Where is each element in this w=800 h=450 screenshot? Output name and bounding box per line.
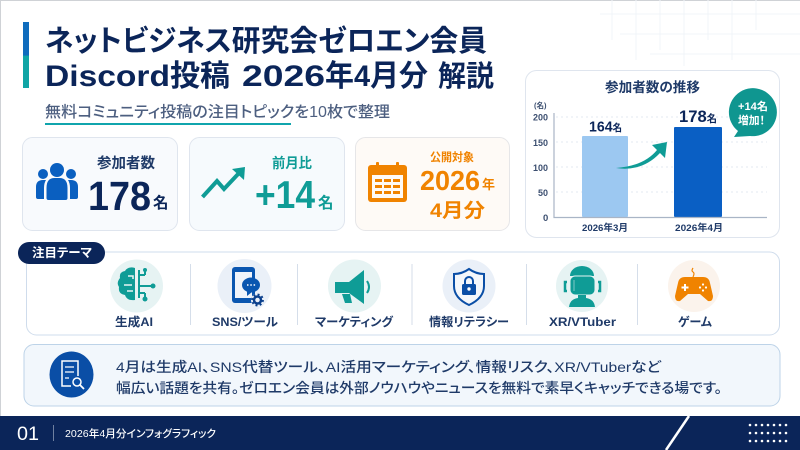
bar chart: 100: [533, 163, 548, 174]
title: 投稿: [170, 60, 230, 93]
icon: people: [36, 163, 78, 200]
panel: publication target: 年: [482, 177, 495, 192]
theme: information literacy: 情報リテラシー: [429, 314, 509, 329]
panel: summary: [24, 344, 780, 406]
callout: increase: +14名: [738, 99, 768, 113]
panel: month over month: +14: [255, 174, 315, 217]
bar chart: 2026年4月: [675, 222, 723, 234]
panel: featured themes: [18, 242, 780, 335]
theme: XR VTuber: XR/VTuber: [549, 315, 616, 329]
panel: participants: 参加者数: [97, 154, 155, 172]
panel: participant chart: [526, 70, 780, 238]
theme: information literacy: [429, 260, 509, 329]
bar chart: 0: [543, 213, 548, 224]
icon: rising arrow: [202, 167, 245, 197]
arrow: increase: [616, 142, 667, 169]
chart heading: 参加者数の推移: [605, 79, 701, 95]
bar chart: (名): [534, 100, 547, 110]
title: [45, 25, 494, 93]
theme: marketing: マーケティング: [315, 314, 394, 329]
theme: generative AI: 生成AI: [115, 314, 153, 329]
panel: publication target: 公開対象: [430, 150, 474, 164]
page number: 01: [17, 424, 39, 445]
summary text: 幅広い話題を共有。ゼロエン会員は外部ノウハウやニュースを無料で素早くキャッチできる場です。: [116, 380, 722, 396]
heading: featured themes: [18, 242, 105, 264]
theme: generative AI: [110, 260, 163, 329]
panel: month over month: 名: [318, 194, 334, 212]
icon: document search: [50, 352, 94, 398]
bar chart: 150: [533, 138, 548, 149]
bar chart: 50: [538, 188, 548, 199]
title: ネットビジネス研究会ゼロエン会員: [45, 25, 487, 58]
theme: SNS tools: SNS/ツール: [212, 315, 278, 329]
bar chart: 200: [533, 112, 548, 124]
title: 解説: [438, 60, 494, 93]
callout: increase: [729, 88, 777, 137]
icon: calendar: [368, 162, 407, 202]
title: 年4月分: [325, 60, 428, 93]
theme: games: ゲーム: [678, 314, 712, 329]
bar chart: 178名: [679, 107, 717, 126]
panel: participants: 名: [153, 194, 169, 212]
panel: publication target: 2026: [420, 165, 480, 196]
theme: games: [668, 260, 720, 329]
title: Discord: [45, 60, 170, 93]
panel: publication target: 4月分: [430, 200, 486, 222]
panel: month over month: 前月比: [272, 155, 312, 171]
panel: month over month: [190, 138, 344, 230]
subtitle: 無料コミュニティ投稿の注目トピックを10枚で整理: [45, 103, 391, 121]
footer text: 2026年4月分インフォグラフィック: [65, 427, 216, 440]
panel: publication target: [356, 138, 510, 230]
heading: featured themes: 注目テーマ: [32, 245, 92, 260]
summary text: 4月は生成AI、SNS代替ツール、AI活用マーケティング、情報リスク、XR/VTuberなど: [116, 359, 662, 375]
bar chart: [533, 100, 767, 234]
bar chart: 164名: [589, 118, 622, 136]
panel: participants: 178: [88, 173, 151, 219]
summary text: [116, 359, 722, 396]
footer: [0, 416, 800, 450]
theme: SNS tools: [212, 259, 278, 329]
title: 2026: [242, 60, 325, 93]
dot grid: [749, 424, 787, 442]
bar chart: 2026年3月: [582, 222, 628, 234]
title accent bar: [23, 22, 29, 88]
theme: marketing: [315, 260, 394, 329]
callout: increase: 増加！: [738, 113, 765, 127]
panel: participants: [22, 138, 178, 230]
theme: XR VTuber: [549, 260, 616, 329]
